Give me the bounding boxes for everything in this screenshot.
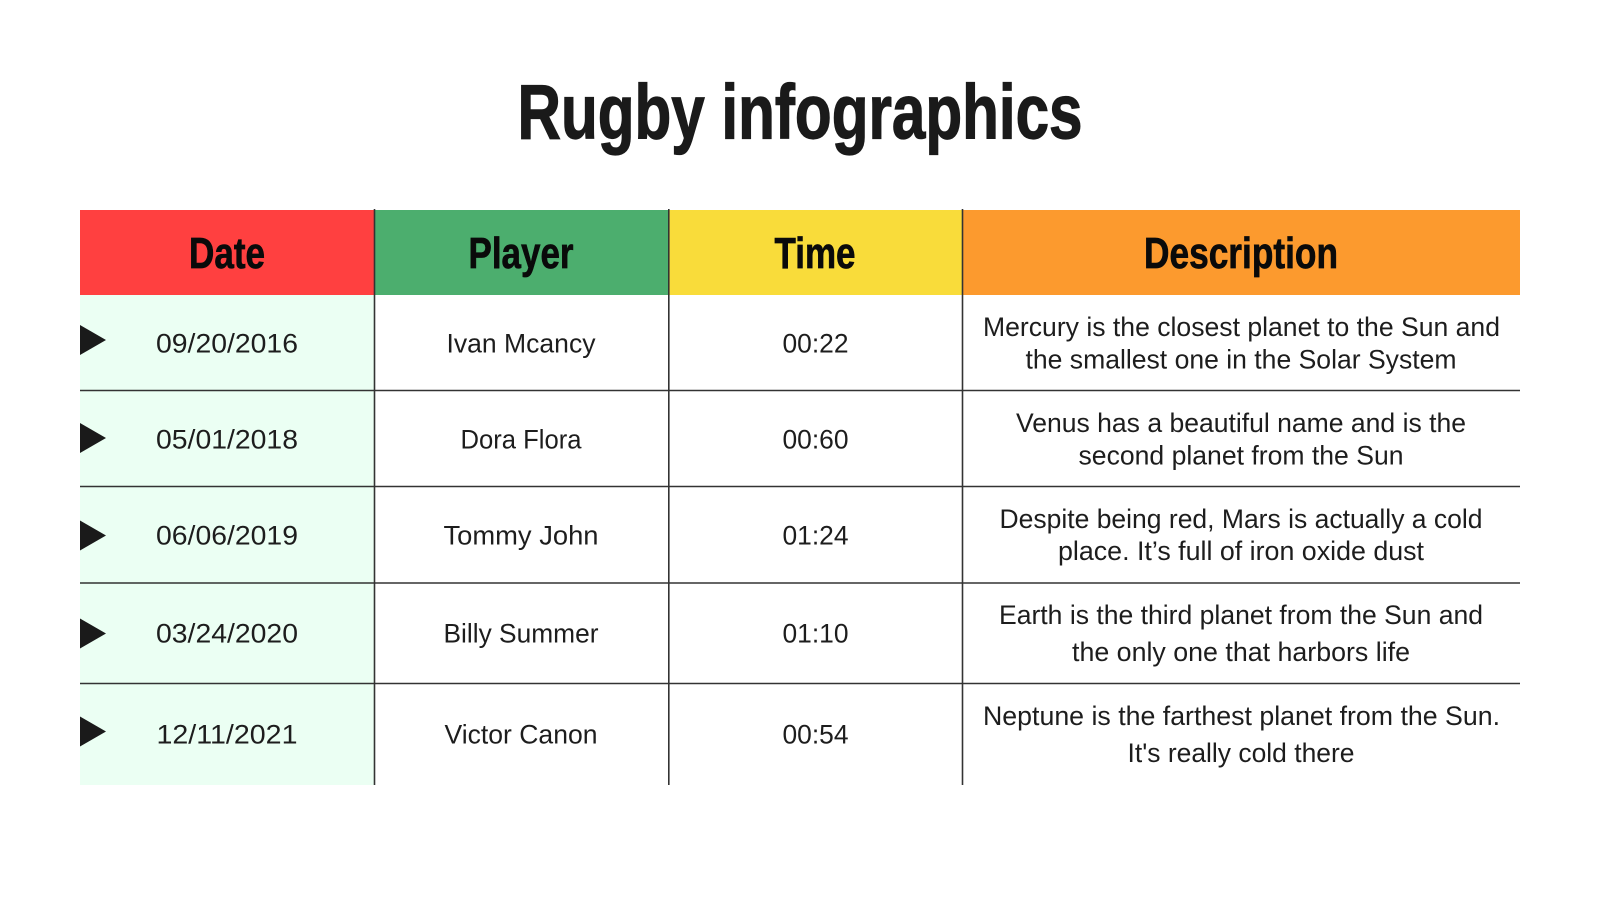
date: 05/01/2018	[156, 424, 298, 454]
description	[983, 312, 1500, 374]
description: Earth is the third planet from the Sun and	[999, 600, 1483, 630]
player: Victor Canon	[444, 720, 598, 750]
description: It's really cold there	[1128, 738, 1354, 768]
icon: play arrow	[80, 423, 106, 453]
header: Description	[963, 210, 1520, 295]
description: second planet from the Sun	[1078, 440, 1404, 470]
description: Venus has a beautiful name and is the	[1016, 408, 1466, 438]
header: Player: Player	[468, 229, 574, 278]
row 1	[80, 312, 1500, 374]
date: 06/06/2019	[156, 520, 298, 550]
time: 01:24	[782, 520, 849, 550]
date column background	[80, 295, 374, 785]
header: Date: Date	[189, 229, 265, 278]
header: Time	[669, 210, 963, 295]
header: Date	[80, 210, 375, 295]
row 2	[80, 408, 1466, 470]
row 5	[80, 701, 1500, 768]
description	[1016, 408, 1466, 470]
time: 00:22	[782, 328, 848, 358]
time: 00:60	[782, 424, 848, 454]
description: Despite being red, Mars is actually a cold	[1000, 504, 1482, 534]
description: Neptune is the farthest planet from the Sun.	[983, 701, 1500, 731]
header: Description: Description	[1144, 229, 1338, 278]
row 3	[80, 504, 1482, 566]
player: Ivan Mcancy	[446, 328, 596, 358]
date: 03/24/2020	[156, 618, 298, 648]
header: Time: Time	[774, 229, 856, 278]
icon: play arrow	[80, 520, 106, 550]
icon: play arrow	[80, 618, 106, 648]
player: Billy Summer	[444, 618, 599, 648]
description	[983, 701, 1500, 768]
description: the smallest one in the Solar System	[1026, 344, 1456, 374]
description: Mercury is the closest planet to the Sun and	[983, 312, 1500, 342]
header: Player	[375, 210, 669, 295]
time: 01:10	[782, 618, 848, 648]
table header row	[80, 210, 1520, 295]
player: Tommy John	[444, 520, 598, 550]
time: 00:54	[782, 720, 849, 750]
title: Rugby infographics	[518, 70, 1082, 156]
description	[1000, 504, 1482, 566]
icon: play arrow	[80, 716, 106, 746]
panel: rugby table	[80, 209, 1520, 785]
date: 09/20/2016	[156, 328, 298, 358]
row 4	[80, 600, 1483, 667]
description: the only one that harbors life	[1072, 637, 1410, 667]
description: place. It’s full of iron oxide dust	[1058, 536, 1425, 566]
icon: play arrow	[80, 325, 106, 355]
player: Dora Flora	[460, 424, 582, 454]
date: 12/11/2021	[156, 720, 298, 750]
description	[999, 600, 1483, 667]
